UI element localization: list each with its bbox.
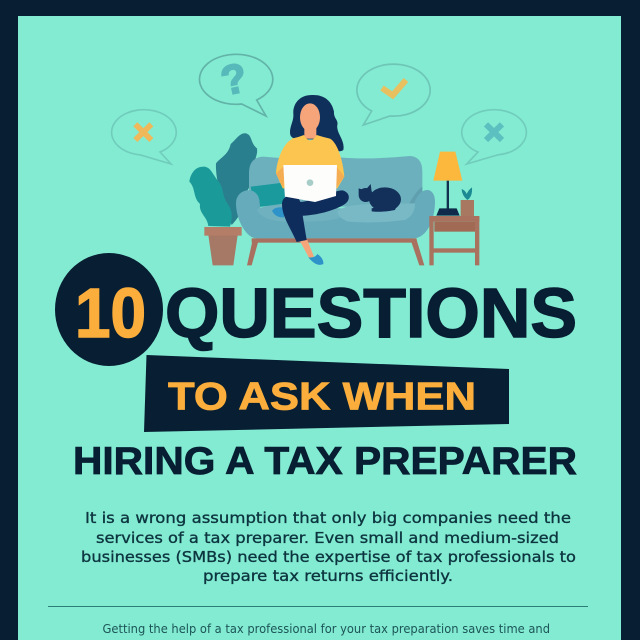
speech bubble: teal cross [462,110,526,164]
icon: sofa [236,156,435,265]
heading: hiring a tax preparer: HIRING A TAX PREPARER [73,440,577,483]
legs [300,190,349,216]
speech bubble: check mark [357,64,430,125]
icon: potted plant [189,133,257,265]
number badge: 10: 10 [75,274,146,352]
heading: QUESTIONS: QUESTIONS [165,274,577,352]
icon: side table with lamp [429,152,479,265]
text block: body paragraph: Getting the help of a tax professional for your tax preparation saves time and [102,621,550,636]
laptop [283,165,337,202]
text block: introduction: services of a tax preparer. Even small and medium-sized [96,529,559,547]
back foot and slipper [299,240,314,258]
speech bubble: orange cross [112,110,176,164]
speech bubble: question mark: ? [217,54,251,104]
icon: woman with laptop [272,95,349,265]
banner: to ask when: TO ASK WHEN [168,376,476,418]
banner: to ask when [144,355,509,432]
illustration: woman on sofa with speech bubbles [112,54,526,265]
text block: introduction: It is a wrong assumption that only big companies need the [85,509,571,527]
text block: introduction: prepare tax returns efficiently. [203,567,453,585]
text block: introduction: businesses (SMBs) need the expertise of tax professionals to [81,548,576,566]
text block: introduction [81,509,576,585]
left foot [272,207,284,217]
speech bubble: question mark [199,54,273,116]
number badge: 10 [55,253,163,366]
icon: cat [359,184,401,212]
